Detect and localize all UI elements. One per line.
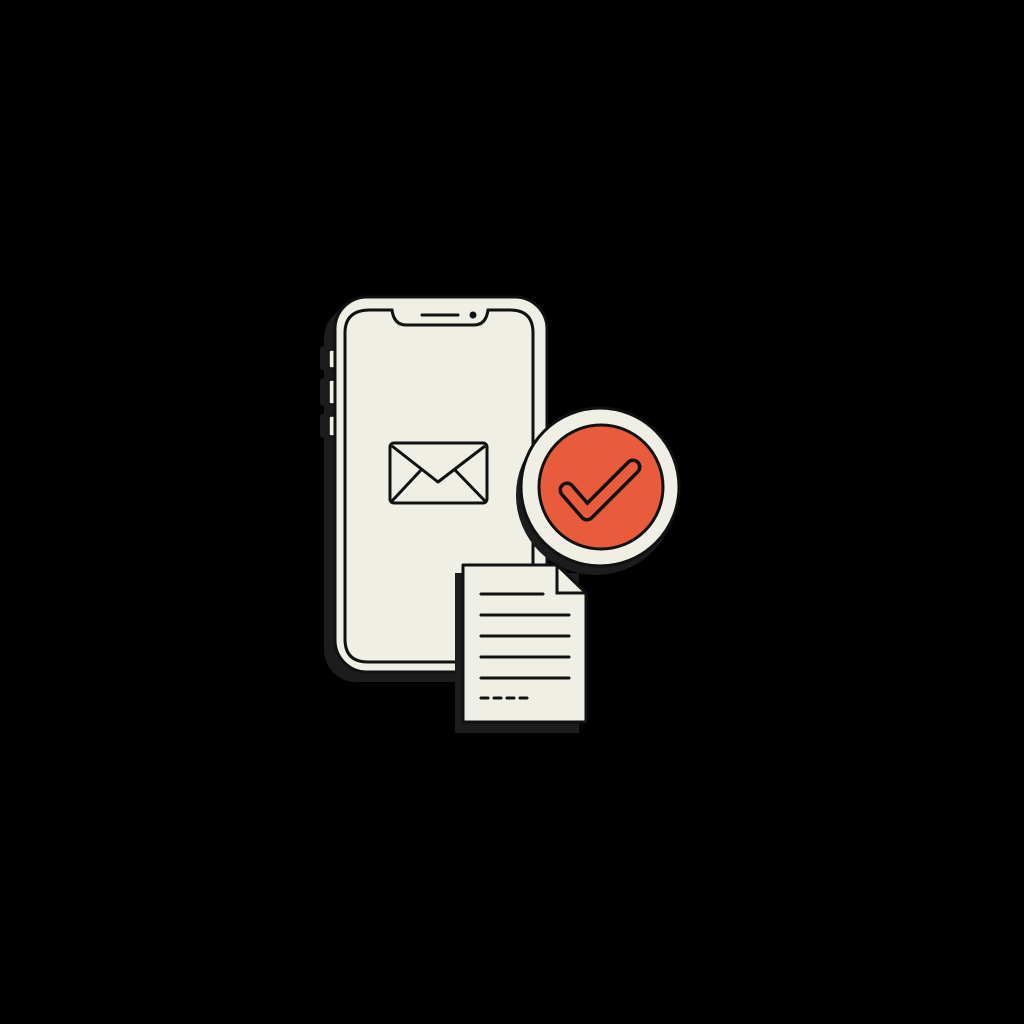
- icon: check badge: [516, 408, 679, 575]
- icon: envelope: [390, 443, 487, 503]
- icon: phone: [320, 297, 547, 682]
- icon: document: [455, 565, 586, 733]
